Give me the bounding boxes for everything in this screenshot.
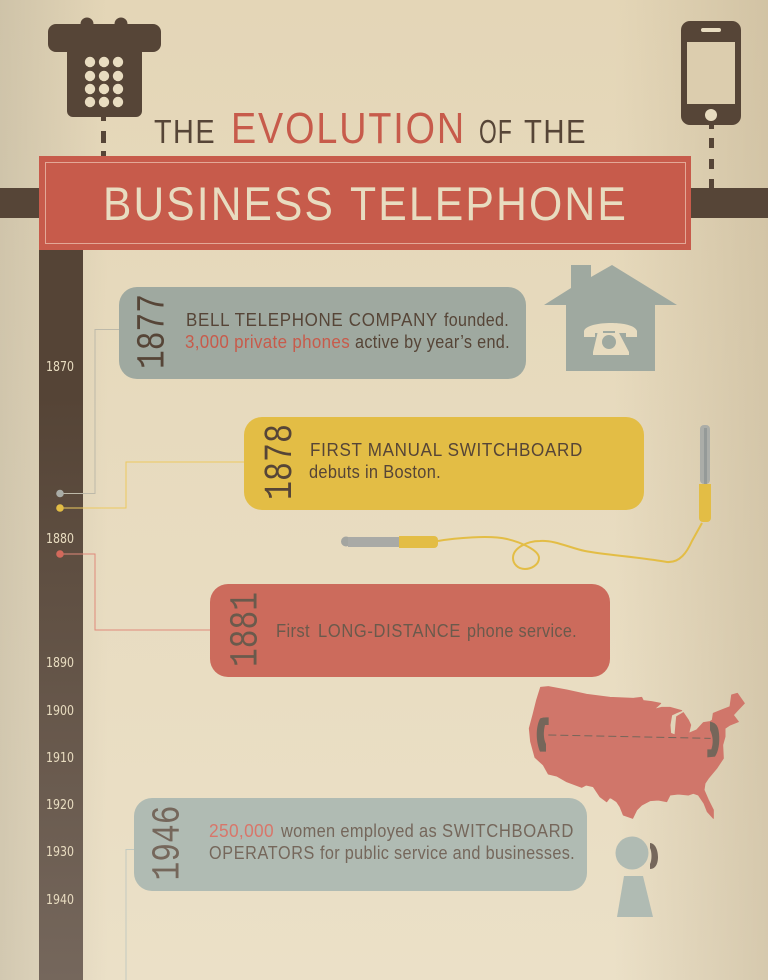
panel: 1881: First	[276, 621, 310, 641]
panel: 1881: phone service.	[467, 621, 577, 641]
panel: 1878	[244, 417, 644, 510]
icon: house with telephone	[544, 265, 677, 371]
banner: business telephone: BUSINESS	[103, 177, 335, 230]
title line: OF	[479, 113, 513, 150]
banner: business telephone	[39, 156, 691, 250]
icon: desk telephone	[48, 18, 161, 156]
icon: US map with long-distance call	[529, 687, 744, 818]
panel: 1878: 1878	[259, 424, 304, 500]
banner: business telephone: TELEPHONE	[350, 177, 628, 230]
timeline bar	[39, 250, 83, 980]
panel: 1946: 1946	[146, 806, 192, 880]
panel: 1881	[210, 584, 610, 677]
panel: 1877: 1877	[132, 294, 176, 369]
panel: 1878: debuts in Boston.	[309, 462, 441, 482]
horizontal band behind banner	[0, 188, 768, 218]
panel: 1878: FIRST MANUAL SWITCHBOARD	[310, 440, 583, 460]
timeline bar: 1940	[46, 893, 74, 908]
timeline bar: 1870	[46, 360, 74, 375]
icon: smartphone	[681, 21, 741, 189]
panel: 1877: founded.	[444, 310, 509, 330]
timeline bar: 1880	[46, 532, 74, 547]
title line: EVOLUTION	[231, 105, 466, 153]
icon: switchboard operator	[616, 836, 658, 917]
panel: 1877: 3,000 private phones	[185, 332, 350, 352]
panel: 1946	[134, 798, 587, 891]
timeline bar: 1930	[46, 845, 74, 860]
panel: 1877: active by year’s end.	[355, 332, 510, 352]
timeline bar: 1890	[46, 656, 74, 671]
timeline bar: 1900	[46, 704, 74, 719]
connector: 1878	[56, 462, 244, 512]
connector: 1877	[56, 330, 119, 497]
title line: THE	[524, 113, 587, 150]
connector: 1946	[126, 850, 134, 980]
timeline bar: 1910	[46, 751, 74, 766]
title line: THE	[154, 113, 216, 150]
panel: 1946: OPERATORS	[209, 843, 315, 863]
connector: 1881	[56, 550, 210, 630]
panel: 1881: LONG-DISTANCE	[318, 621, 461, 641]
title line	[154, 105, 587, 153]
panel: 1881: 1881	[224, 592, 270, 667]
panel: 1946: 250,000	[209, 821, 274, 841]
panel: 1946: for public service and businesses.	[320, 843, 575, 863]
panel: 1946: SWITCHBOARD	[442, 821, 574, 841]
icon: switchboard cable and jacks	[341, 425, 711, 569]
panel: 1877: BELL TELEPHONE COMPANY	[186, 310, 438, 330]
panel: 1877	[119, 287, 526, 379]
timeline bar: 1920	[46, 798, 74, 813]
panel: 1946: women employed as	[280, 821, 437, 841]
